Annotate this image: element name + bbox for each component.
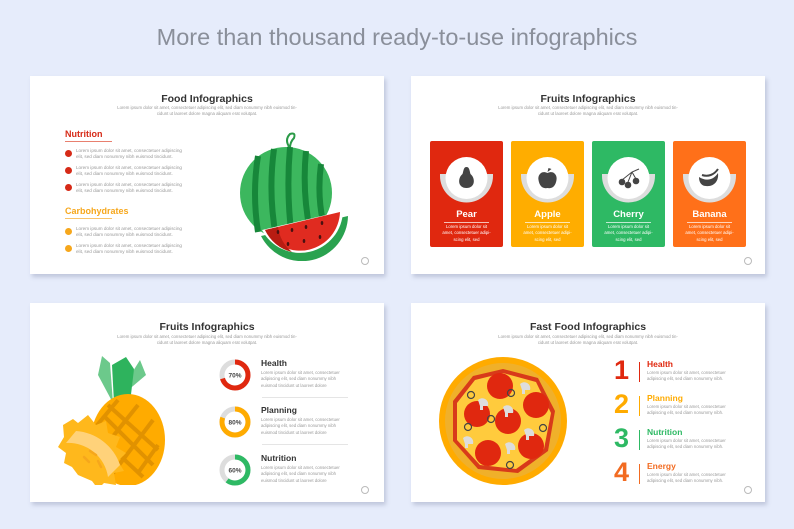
nutrition list: elit, sed diam nonummy nibh euismod tincidunt. <box>76 188 173 193</box>
card: pear: Pear <box>456 209 477 220</box>
nutrition list: elit, sed diam nonummy nibh euismod tincidunt. <box>76 171 173 176</box>
donut: health 70%: 70% <box>228 372 242 380</box>
card: apple: amet, consectetuer adipi- <box>523 230 572 235</box>
carbohydrates heading: Carbohydrates <box>65 206 129 216</box>
item: 2 planning: 2 <box>614 389 629 419</box>
subtitle text: cidunt ut laoreet dolore magna aliquam erat volutpat. <box>538 111 638 116</box>
card: apple: Lorem ipsum dolor sit <box>527 224 568 229</box>
item: 2 planning: adipiscing elit, sed diam nonummy nibh. <box>647 410 723 415</box>
panel: food infographics <box>30 76 384 274</box>
card: banana <box>673 141 746 247</box>
subtitle text: cidunt ut laoreet dolore magna aliquam erat volutpat. <box>157 111 257 116</box>
item: 1 health <box>614 355 726 385</box>
page number <box>361 486 369 494</box>
item: 3 nutrition: Nutrition <box>647 427 682 437</box>
nutrition list: Lorem ipsum dolor sit amet, consectetuer adipiscing <box>76 165 182 170</box>
card: banana: scing elit, sed <box>696 237 723 242</box>
card: apple <box>511 141 584 247</box>
nutrition list: Lorem ipsum dolor sit amet, consectetuer adipiscing <box>76 148 182 153</box>
donut: nutrition 60%: adipiscing elit, sed diam nonummy nibh <box>261 471 336 476</box>
nutrition list <box>65 148 182 193</box>
donut: health 70%: Lorem ipsum dolor sit amet, consectetuer <box>261 370 340 375</box>
subtitle text <box>117 105 297 116</box>
item: 1 health: Lorem ipsum dolor sit amet, consectetuer <box>647 370 726 375</box>
donut: planning 80%: Lorem ipsum dolor sit amet, consectetuer <box>261 417 340 422</box>
item: 4 energy <box>614 457 726 487</box>
nutrition list: elit, sed diam nonummy nibh euismod tincidunt. <box>76 154 173 159</box>
card: cherry <box>592 141 665 247</box>
card: banana: Lorem ipsum dolor sit <box>689 224 730 229</box>
panel heading: Food Infographics <box>161 93 253 105</box>
donut: health 70%: adipiscing elit, sed diam nonummy nibh <box>261 376 336 381</box>
donut: planning 80%: 80% <box>228 420 242 426</box>
nutrition heading <box>65 129 112 142</box>
subtitle text <box>117 334 297 345</box>
donut: planning 80%: Planning <box>261 405 297 415</box>
item: 3 nutrition <box>614 423 726 453</box>
item: 2 planning <box>614 389 726 419</box>
item: 3 nutrition: Lorem ipsum dolor sit amet, consectetuer <box>647 438 726 443</box>
card: apple: scing elit, sed <box>534 237 561 242</box>
subtitle text: Lorem ipsum dolor sit amet, consectetuer adipiscing elit, sed diam nonummy nibh euismod tin- <box>117 334 297 339</box>
subtitle text: cidunt ut laoreet dolore magna aliquam erat volutpat. <box>157 340 257 345</box>
nutrition heading: Nutrition <box>65 129 102 139</box>
item: 3 nutrition: 3 <box>614 423 629 453</box>
donut: health 70%: euismod tincidunt ut laoreet dolore <box>261 383 327 388</box>
donut: nutrition 60%: 60% <box>228 468 242 474</box>
card: pear: Lorem ipsum dolor sit <box>446 224 487 229</box>
carbohydrates list: elit, sed diam nonummy nibh euismod tincidunt. <box>76 249 173 254</box>
nutrition list: Lorem ipsum dolor sit amet, consectetuer adipiscing <box>76 182 182 187</box>
icon: pizza <box>439 357 567 485</box>
carbohydrates list: Lorem ipsum dolor sit amet, consectetuer adipiscing <box>76 243 182 248</box>
carbohydrates list: Lorem ipsum dolor sit amet, consectetuer adipiscing <box>76 226 182 231</box>
subtitle text <box>498 334 678 345</box>
icon: pineapple <box>58 356 165 485</box>
carbohydrates list: elit, sed diam nonummy nibh euismod tincidunt. <box>76 232 173 237</box>
donut: health 70%: Health <box>261 358 287 368</box>
item: 3 nutrition: adipiscing elit, sed diam nonummy nibh. <box>647 444 723 449</box>
page number <box>744 486 752 494</box>
item: 4 energy: Lorem ipsum dolor sit amet, consectetuer <box>647 472 726 477</box>
card: cherry: scing elit, sed <box>615 237 642 242</box>
panel: fruits infographics donuts <box>30 303 384 502</box>
donut: nutrition 60%: Lorem ipsum dolor sit amet, consectetuer <box>261 465 340 470</box>
panel heading: Fruits Infographics <box>159 321 255 333</box>
item: 2 planning: Planning <box>647 393 683 403</box>
subtitle text: cidunt ut laoreet dolore magna aliquam erat volutpat. <box>538 340 638 345</box>
item: 4 energy: adipiscing elit, sed diam nonummy nibh. <box>647 478 723 483</box>
subtitle text: Lorem ipsum dolor sit amet, consectetuer adipiscing elit, sed diam nonummy nibh euismod tin- <box>498 334 678 339</box>
page number <box>361 257 369 265</box>
icon: watermelon <box>240 132 348 261</box>
donut: health 70% <box>220 358 340 390</box>
donut: planning 80%: euismod tincidunt ut laoreet dolore <box>261 430 327 435</box>
item: 4 energy: 4 <box>614 457 629 487</box>
carbohydrates heading <box>65 206 112 219</box>
carbohydrates list <box>65 226 182 254</box>
donut: planning 80%: adipiscing elit, sed diam nonummy nibh <box>261 423 336 428</box>
card: pear: amet, consectetuer adipi- <box>442 230 491 235</box>
panel heading: Fast Food Infographics <box>530 321 646 333</box>
card: apple: Apple <box>534 209 561 220</box>
card: cherry: amet, consectetuer adipi- <box>604 230 653 235</box>
panel: fruits infographics cards <box>411 76 765 274</box>
card: pear <box>430 141 503 247</box>
card: banana: amet, consectetuer adipi- <box>685 230 734 235</box>
subtitle text: Lorem ipsum dolor sit amet, consectetuer adipiscing elit, sed diam nonummy nibh euismod tin- <box>117 105 297 110</box>
subtitle text: Lorem ipsum dolor sit amet, consectetuer adipiscing elit, sed diam nonummy nibh euismod tin- <box>498 105 678 110</box>
item: 2 planning: Lorem ipsum dolor sit amet, consectetuer <box>647 404 726 409</box>
donut: nutrition 60%: Nutrition <box>261 453 296 463</box>
card: banana: Banana <box>692 209 727 220</box>
panel: fast food infographics <box>411 303 765 502</box>
donut: planning 80% <box>220 405 340 438</box>
donut: nutrition 60%: euismod tincidunt ut laoreet dolore <box>261 478 327 483</box>
panel heading: Fruits Infographics <box>540 93 636 105</box>
item: 1 health: 1 <box>614 355 629 385</box>
page number <box>744 257 752 265</box>
title: More than thousand ready-to-use infographics <box>157 24 637 50</box>
item: 1 health: adipiscing elit, sed diam nonummy nibh. <box>647 376 723 381</box>
item: 1 health: Health <box>647 359 673 369</box>
item: 4 energy: Energy <box>647 461 676 471</box>
card: pear: scing elit, sed <box>453 237 480 242</box>
card: cherry: Lorem ipsum dolor sit <box>608 224 649 229</box>
donut: nutrition 60% <box>220 453 340 486</box>
card: cherry: Cherry <box>613 209 644 220</box>
subtitle text <box>498 105 678 116</box>
